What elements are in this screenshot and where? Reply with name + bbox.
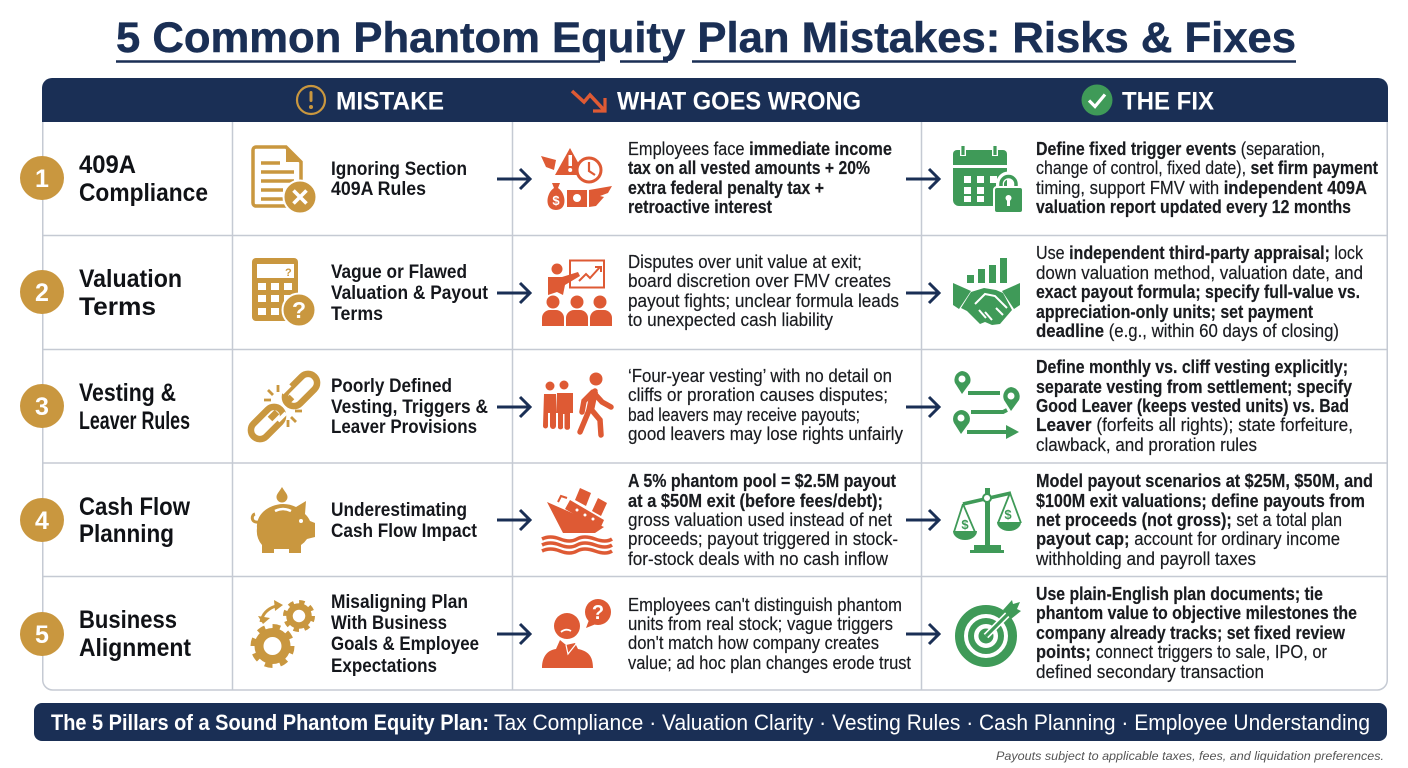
icon: balance scale: $ xyxy=(961,517,969,532)
fix text: $100M exit valuations; define payouts from xyxy=(1036,491,1365,511)
icon: green check xyxy=(1082,84,1112,116)
heading: mistake: MISTAKE xyxy=(336,88,444,116)
arrow xyxy=(906,169,939,189)
icon: calculator with question xyxy=(252,258,316,326)
row heading: Alignment xyxy=(79,634,192,662)
icon: target with arrow xyxy=(960,600,1021,662)
what goes wrong text: payout fights; unclear formula leads xyxy=(628,291,899,311)
what goes wrong text: gross valuation used instead of net xyxy=(628,510,892,530)
what goes wrong text: extra federal penalty tax + xyxy=(628,178,824,198)
what goes wrong text: value; ad hoc plan changes erode trust xyxy=(628,653,911,673)
mistake text xyxy=(331,376,488,438)
what goes wrong text: cliffs or proration causes disputes; xyxy=(628,385,888,405)
mistake text: Underestimating xyxy=(331,500,467,521)
icon: sinking ship xyxy=(542,488,612,553)
fix text: separate vesting from settlement; specify xyxy=(1036,377,1352,397)
what goes wrong text: retroactive interest xyxy=(628,197,772,217)
arrow xyxy=(497,283,530,303)
fix text: Define fixed trigger events (separation, xyxy=(1036,139,1325,159)
row heading: Vesting & xyxy=(79,379,176,407)
what goes wrong text xyxy=(628,471,898,569)
arrow xyxy=(497,510,530,530)
icon: document with x xyxy=(253,147,316,214)
fix text: net proceeds (not gross); set a total plan xyxy=(1036,510,1342,530)
what goes wrong text: at a $50M exit (before fees/debt); xyxy=(628,491,883,511)
what goes wrong text: proceeds; payout triggered in stock- xyxy=(628,529,898,549)
icon: confused person with question: ? xyxy=(592,602,604,624)
row 3: vesting and leaver rules xyxy=(20,357,1353,455)
arrow xyxy=(906,624,939,644)
what goes wrong text xyxy=(628,139,892,217)
what goes wrong text: Disputes over unit value at exit; xyxy=(628,252,862,272)
row heading xyxy=(79,265,182,321)
row heading: Compliance xyxy=(79,179,208,207)
heading: what goes wrong: WHAT GOES WRONG xyxy=(617,88,861,116)
bottom banner: five pillars xyxy=(34,703,1387,741)
icon: balance scale: $ xyxy=(1004,507,1012,522)
icon: handshake with bars xyxy=(953,258,1020,325)
fix text: clawback, and proration rules xyxy=(1036,435,1257,455)
number badge 2 xyxy=(20,270,64,314)
what goes wrong text: bad leavers may receive payouts; xyxy=(628,405,860,425)
arrow xyxy=(906,397,939,417)
icon: broken chain xyxy=(247,370,321,443)
fix text: appreciation-only units; set payment xyxy=(1036,302,1313,322)
row heading xyxy=(79,379,190,435)
mistake text: Leaver Provisions xyxy=(331,417,477,438)
what goes wrong text: to unexpected cash liability xyxy=(628,310,833,330)
row heading xyxy=(79,493,190,548)
fix text: company already tracks; set fixed review xyxy=(1036,623,1346,643)
fix text: withholding and payroll taxes xyxy=(1035,549,1256,569)
row heading: 409A xyxy=(79,151,136,179)
row heading: Terms xyxy=(79,293,156,321)
what goes wrong text: don't match how company creates xyxy=(628,633,879,653)
fix text xyxy=(1036,243,1364,341)
mistake text: Vague or Flawed xyxy=(331,262,467,283)
fix text: change of control, fixed date), set firm payment xyxy=(1036,158,1378,178)
mistake text xyxy=(331,592,479,677)
row heading xyxy=(79,151,208,207)
fix text: deadline (e.g., within 60 days of closing) xyxy=(1036,321,1339,341)
number badge 5: 5 xyxy=(35,621,49,649)
arrow xyxy=(497,169,530,189)
fix text: valuation report updated every 12 months xyxy=(1036,197,1351,217)
heading: the fix: THE FIX xyxy=(1122,88,1214,116)
fix text: Model payout scenarios at $25M, $50M, and xyxy=(1036,471,1373,491)
what goes wrong text xyxy=(628,252,899,330)
row 5: business alignment xyxy=(20,584,1357,682)
fix text: phantom value to objective milestones the xyxy=(1036,603,1357,623)
what goes wrong text: for-stock deals with no cash inflow xyxy=(628,549,889,569)
row 4: cash flow planning xyxy=(20,471,1373,569)
number badge 1: 1 xyxy=(35,165,49,193)
icon: calendar with lock xyxy=(953,145,1023,213)
number badge 1 xyxy=(20,156,64,200)
row heading xyxy=(79,606,192,662)
fix text: payout cap; account for ordinary income xyxy=(1036,529,1340,549)
mistake text: Expectations xyxy=(331,656,437,677)
fix text xyxy=(1036,139,1378,217)
mistake text: Cash Flow Impact xyxy=(331,521,478,542)
number badge 3 xyxy=(20,384,64,428)
fix text xyxy=(1036,357,1353,455)
mistake text: With Business xyxy=(331,613,447,634)
fix text: exact payout formula; specify full-value vs. xyxy=(1036,282,1360,302)
bottom banner: five pillars: The 5 Pillars of a Sound Phantom Equity Plan: xyxy=(51,710,489,735)
icon: presenter and audience xyxy=(542,260,612,326)
mistake text: 409A Rules xyxy=(331,179,426,200)
mistake text xyxy=(331,500,478,542)
mistake text: Ignoring Section xyxy=(331,159,467,180)
icon: calculator with question: ? xyxy=(292,297,306,323)
arrow xyxy=(906,283,939,303)
number badge 3: 3 xyxy=(35,393,49,421)
icon: calculator with question: ? xyxy=(285,267,292,279)
fix text xyxy=(1036,584,1357,682)
number badge 4: 4 xyxy=(35,507,49,535)
fix text: Use independent third-party appraisal; lock xyxy=(1036,243,1364,263)
fix text: defined secondary transaction xyxy=(1036,662,1264,682)
row heading: Cash Flow xyxy=(79,493,190,521)
icon: confused person with question xyxy=(542,599,611,668)
what goes wrong text xyxy=(628,366,903,444)
table frame xyxy=(43,110,1387,690)
what goes wrong text: A 5% phantom pool = $2.5M payout xyxy=(628,471,896,491)
icon: falling arrow xyxy=(572,91,605,111)
fix text: Use plain-English plan documents; tie xyxy=(1036,584,1323,604)
mistake text xyxy=(331,262,489,325)
mistake text: Vesting, Triggers & xyxy=(331,397,488,418)
what goes wrong text: units from real stock; vague triggers xyxy=(628,614,893,634)
icon: route pins xyxy=(953,371,1020,439)
what goes wrong text: board discretion over FMV creates xyxy=(628,271,891,291)
row heading: Leaver Rules xyxy=(79,407,190,435)
row heading: Valuation xyxy=(79,265,182,293)
what goes wrong text: good leavers may lose rights unfairly xyxy=(628,424,903,444)
row 2: valuation terms xyxy=(20,243,1364,341)
footnote: Payouts subject to applicable taxes, fees, and liquidation preferences. xyxy=(996,749,1384,763)
mistake text: Misaligning Plan xyxy=(331,592,468,613)
fix text: Define monthly vs. cliff vesting explicitly; xyxy=(1036,357,1348,377)
arrow xyxy=(906,510,939,530)
icon: piggy bank xyxy=(252,487,315,553)
mistake text: Valuation & Payout xyxy=(331,283,489,304)
row 1: 409A compliance xyxy=(20,139,1378,217)
mistake text: Poorly Defined xyxy=(331,376,452,397)
fix text: Good Leaver (keeps vested units) vs. Bad xyxy=(1036,396,1349,416)
icon: people and leaver xyxy=(543,372,611,435)
mistake text xyxy=(331,159,467,200)
icon: tax penalty: $ xyxy=(552,193,560,208)
icon: balance scale xyxy=(953,488,1021,553)
row heading: Business xyxy=(79,606,177,634)
fix text: timing, support FMV with independent 409A xyxy=(1036,178,1367,198)
mistake text: Terms xyxy=(331,304,383,325)
number badge 5 xyxy=(20,612,64,656)
title: 5 Common Phantom Equity Plan Mistakes: Risks & Fixes xyxy=(116,14,1296,62)
what goes wrong text: tax on all vested amounts + 20% xyxy=(628,158,870,178)
mistake text: Goals & Employee xyxy=(331,634,479,655)
number badge 4 xyxy=(20,498,64,542)
what goes wrong text: ‘Four-year vesting’ with no detail on xyxy=(628,366,892,386)
row heading: Planning xyxy=(79,520,174,548)
arrow xyxy=(497,624,530,644)
number badge 2: 2 xyxy=(35,279,49,307)
bottom banner: five pillars: Tax Compliance · Valuation Clarity · Vesting Rules · Cash Planning · Employee Understanding xyxy=(494,710,1370,735)
fix text: Leaver (forfeits all rights); state forfeiture, xyxy=(1036,415,1353,435)
fix text: down valuation method, valuation date, and xyxy=(1036,263,1363,283)
icon: tax penalty xyxy=(541,148,612,210)
fix text xyxy=(1035,471,1373,569)
icon: warning circle xyxy=(297,86,325,114)
arrow xyxy=(497,397,530,417)
fix text: points; connect triggers to sale, IPO, or xyxy=(1036,642,1327,662)
icon: gears and arrows xyxy=(253,600,313,666)
what goes wrong text: Employees can't distinguish phantom xyxy=(628,595,902,615)
table header bar xyxy=(42,78,1388,122)
what goes wrong text: Employees face immediate income xyxy=(628,139,892,159)
what goes wrong text xyxy=(628,595,911,673)
